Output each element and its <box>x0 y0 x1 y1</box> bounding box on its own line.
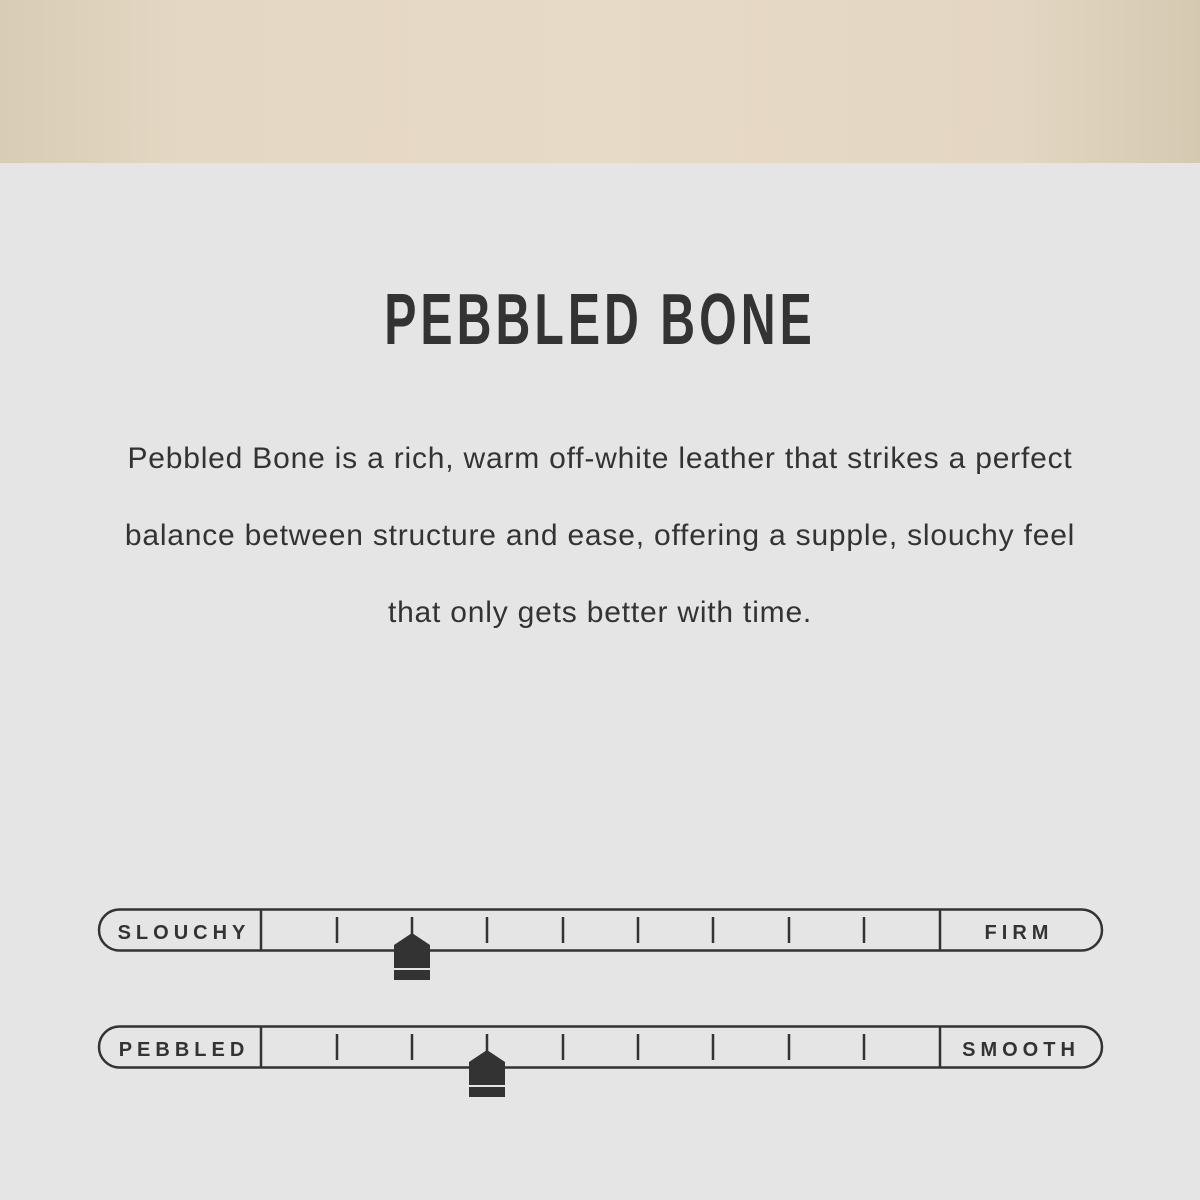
marker <box>394 933 430 980</box>
description: balance between structure and ease, offering a supple, slouchy feel <box>125 519 1075 552</box>
leather texture banner <box>0 0 1200 163</box>
description: that only gets better with time. <box>388 596 812 629</box>
description: Pebbled Bone is a rich, warm off-white leather that strikes a perfect <box>127 442 1073 475</box>
scale: pebbled to smooth: PEBBLED <box>119 1039 249 1061</box>
description <box>125 442 1075 629</box>
scale: slouchy to firm: FIRM <box>985 922 1053 944</box>
scale: slouchy to firm <box>99 909 1102 980</box>
title: PEBBLED BONE <box>384 280 816 360</box>
scale: pebbled to smooth <box>99 1026 1102 1097</box>
scale: pebbled to smooth: SMOOTH <box>962 1039 1080 1061</box>
marker <box>469 1050 505 1097</box>
scale: slouchy to firm: SLOUCHY <box>118 922 250 944</box>
